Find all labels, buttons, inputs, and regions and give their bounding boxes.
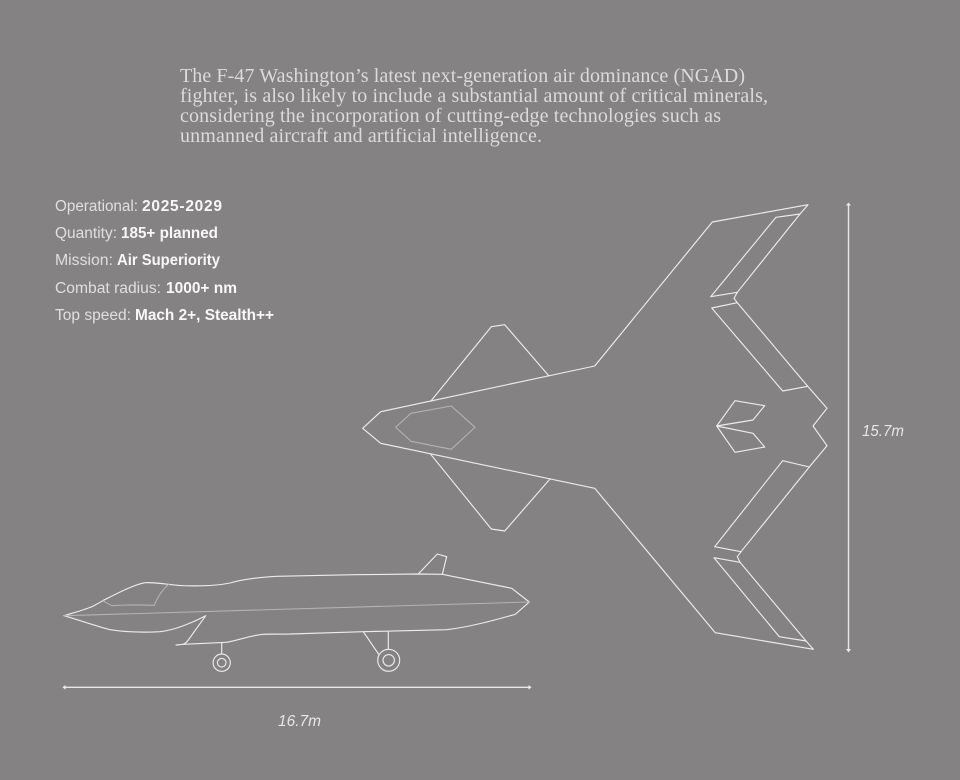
top view: lower wing flaps [714,461,809,641]
side view: front landing gear [213,643,230,671]
spec: mission: Air Superiority [117,252,220,269]
length label: 16.7m [278,713,321,730]
side view: lower nose and air intake [64,616,206,644]
top view: upper wing flaps [711,214,808,391]
spec: combat radius: 1000+ nm [166,280,237,297]
spec: operational: 2025-2029 [142,198,222,215]
spec: top speed: Top speed: [55,307,131,324]
top view: upper canard [431,325,549,401]
wingspan label: 15.7m [862,423,904,440]
side view: rear landing gear [363,632,400,671]
top view: tail fins [717,401,765,452]
spec: quantity [55,225,218,242]
spec: operational [55,198,222,215]
intro text block [180,65,768,147]
intro text block: fighter, is also likely to include a substantial amount of critical minerals, [180,85,768,107]
spec: operational: Operational: [55,198,138,215]
top view: cockpit canopy [396,406,475,449]
intro text block: unmanned aircraft and artificial intelligence. [180,125,542,147]
side-view aircraft drawing [64,554,529,671]
spec: top speed: Mach 2+, Stealth++ [135,307,274,324]
spec: quantity: 185+ planned [121,225,218,242]
specifications list [55,198,274,324]
top-view aircraft drawing [363,205,827,649]
spec: mission [55,252,220,269]
spec: combat radius: Combat radius: [55,280,161,297]
top view: fuselage and wing outline [363,205,827,649]
intro text block: considering the incorporation of cutting-edge technologies such as [180,105,721,127]
side view: tail fin [418,554,447,574]
spec: combat radius [55,280,237,297]
side view: cockpit canopy [103,584,169,606]
spec: quantity: Quantity: [55,225,117,242]
intro text block: The F-47 Washington’s latest next-generation air dominance (NGAD) [180,65,745,87]
side view: upper fuselage [64,574,529,645]
length dimension arrow [62,685,532,690]
spec: top speed [55,307,274,324]
side view: centre line [64,602,529,616]
top view: lower canard [431,454,550,531]
wingspan dimension arrow [846,202,851,652]
spec: mission: Mission: [55,252,113,269]
